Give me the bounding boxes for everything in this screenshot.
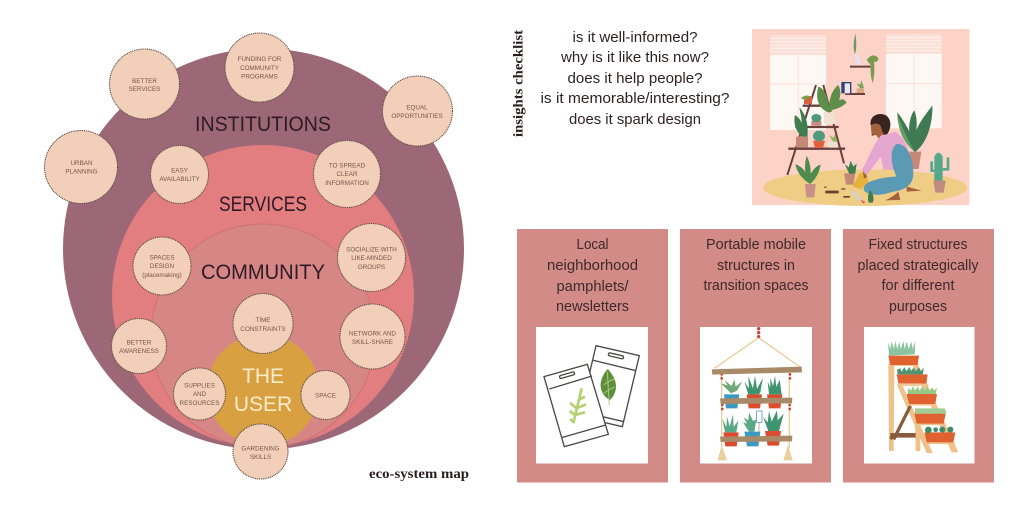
bubble: network and skill-share <box>340 304 405 369</box>
card title: fixed structures: Fixed structures <box>868 237 968 253</box>
bubble: funding for community programs: PROGRAMS <box>241 74 278 80</box>
bubble: funding for community programs: FUNDING FOR <box>238 56 282 63</box>
ring: institutions <box>63 48 464 450</box>
bubble: better awareness: AWARENESS <box>119 348 159 355</box>
heading: institutions: INSTITUTIONS <box>195 113 331 136</box>
bubble: socialize with like-minded groups <box>338 224 406 292</box>
illustration: seed packets <box>544 346 639 447</box>
panel: fixed structures card <box>843 229 994 482</box>
bubble: better awareness: BETTER <box>127 340 152 346</box>
bubble: time constraints <box>233 294 293 354</box>
bubble: gardening skills: GARDENING <box>241 446 280 452</box>
bubble: easy availability <box>150 146 208 204</box>
text block: checklist questions: why is it like this now? <box>560 50 709 66</box>
bubble: socialize with like-minded groups: GROUPS <box>358 264 385 271</box>
heading: services: SERVICES <box>219 193 307 216</box>
bubble: gardening skills <box>233 424 288 479</box>
panel: pamphlets card <box>517 229 668 482</box>
bubble: to spread clear information: CLEAR <box>336 171 358 178</box>
ring: services <box>112 145 414 447</box>
bubble: to spread clear information <box>314 140 380 208</box>
bubble: equal opportunities <box>382 76 452 146</box>
card title: portable structures: Portable mobile <box>706 237 806 253</box>
illustration: tiered plant stand <box>888 341 958 453</box>
bubble: network and skill-share: NETWORK AND <box>349 330 396 338</box>
text block: checklist questions: is it well-informed? <box>572 30 698 46</box>
illustration: hanging planter <box>712 327 802 460</box>
bubble: equal opportunities: OPPORTUNITIES <box>391 113 443 120</box>
panel: portable structures card <box>680 229 831 482</box>
heading: insights checklist: insights checklist <box>510 29 526 137</box>
bubble: supplies and resources: SUPPLIES <box>184 382 215 390</box>
heading: community: COMMUNITY <box>201 261 325 284</box>
bubble: easy availability: EASY <box>171 168 189 174</box>
bubble: funding for community programs <box>225 33 294 102</box>
text block: checklist questions: does it help people? <box>568 71 702 87</box>
bubble: funding for community programs: COMMUNITY <box>240 65 280 72</box>
card title: portable structures: structures in <box>717 258 795 274</box>
bubble: spaces design: (placemaking) <box>142 272 182 279</box>
card title: pamphlets: newsletters <box>556 299 629 315</box>
bubble: spaces design: SPACES <box>149 254 175 262</box>
card title: pamphlets <box>547 237 638 315</box>
card title: pamphlets: neighborhood <box>547 258 638 274</box>
bubble: socialize with like-minded groups: SOCIALIZE WITH <box>346 246 397 254</box>
ring: the user <box>207 334 319 446</box>
bubble: better services: BETTER <box>132 78 157 85</box>
bubble: easy availability: AVAILABILITY <box>159 176 200 183</box>
bubble: network and skill-share: SKILL-SHARE <box>352 339 393 346</box>
card title: fixed structures <box>858 237 979 315</box>
bubble: spaces design <box>133 237 191 295</box>
card title: pamphlets: Local <box>576 237 608 253</box>
bubble: better services: SERVICES <box>129 86 160 93</box>
bubble: better services <box>110 49 180 119</box>
heading: the user: THE <box>242 365 284 388</box>
panel: eco-system map <box>44 33 464 479</box>
bubble: supplies and resources <box>174 368 226 420</box>
bubble: space: SPACE <box>315 392 336 400</box>
bubble: supplies and resources: RESOURCES <box>180 400 219 407</box>
bubble: supplies and resources: AND <box>193 391 207 398</box>
text block: checklist questions <box>540 30 730 128</box>
card title: pamphlets: pamphlets/ <box>556 279 628 295</box>
text block: checklist questions: is it memorable/interesting? <box>540 91 730 107</box>
bubble: better awareness <box>112 318 166 374</box>
card title: fixed structures: for different <box>882 278 954 294</box>
ring: community <box>151 224 375 448</box>
card title: fixed structures: placed strategically <box>858 258 979 274</box>
bubble: urban planning <box>44 130 118 204</box>
bubble: to spread clear information: TO SPREAD <box>329 162 366 170</box>
illustration: person gardening indoors <box>752 29 969 206</box>
text block: checklist questions: does it spark design <box>569 112 701 128</box>
bubble: urban planning: PLANNING <box>65 168 98 176</box>
bubble: socialize with like-minded groups: LIKE-MINDED <box>351 255 392 262</box>
bubble: spaces design: DESIGN <box>150 263 175 270</box>
card title: portable structures <box>704 237 808 294</box>
bubble: to spread clear information: INFORMATION <box>325 180 369 187</box>
bubble: time constraints: TIME <box>255 317 271 324</box>
bubble: equal opportunities: EQUAL <box>406 104 428 112</box>
bubble: gardening skills: SKILLS <box>250 454 271 461</box>
bubble: time constraints: CONSTRAINTS <box>240 326 286 333</box>
bubble: urban planning: URBAN <box>70 160 93 167</box>
heading: the user: USER <box>234 393 292 416</box>
card title: fixed structures: purposes <box>889 299 947 315</box>
bubble: space <box>301 370 350 420</box>
card title: portable structures: transition spaces <box>704 278 808 294</box>
caption: eco-system map: eco-system map <box>369 466 469 481</box>
